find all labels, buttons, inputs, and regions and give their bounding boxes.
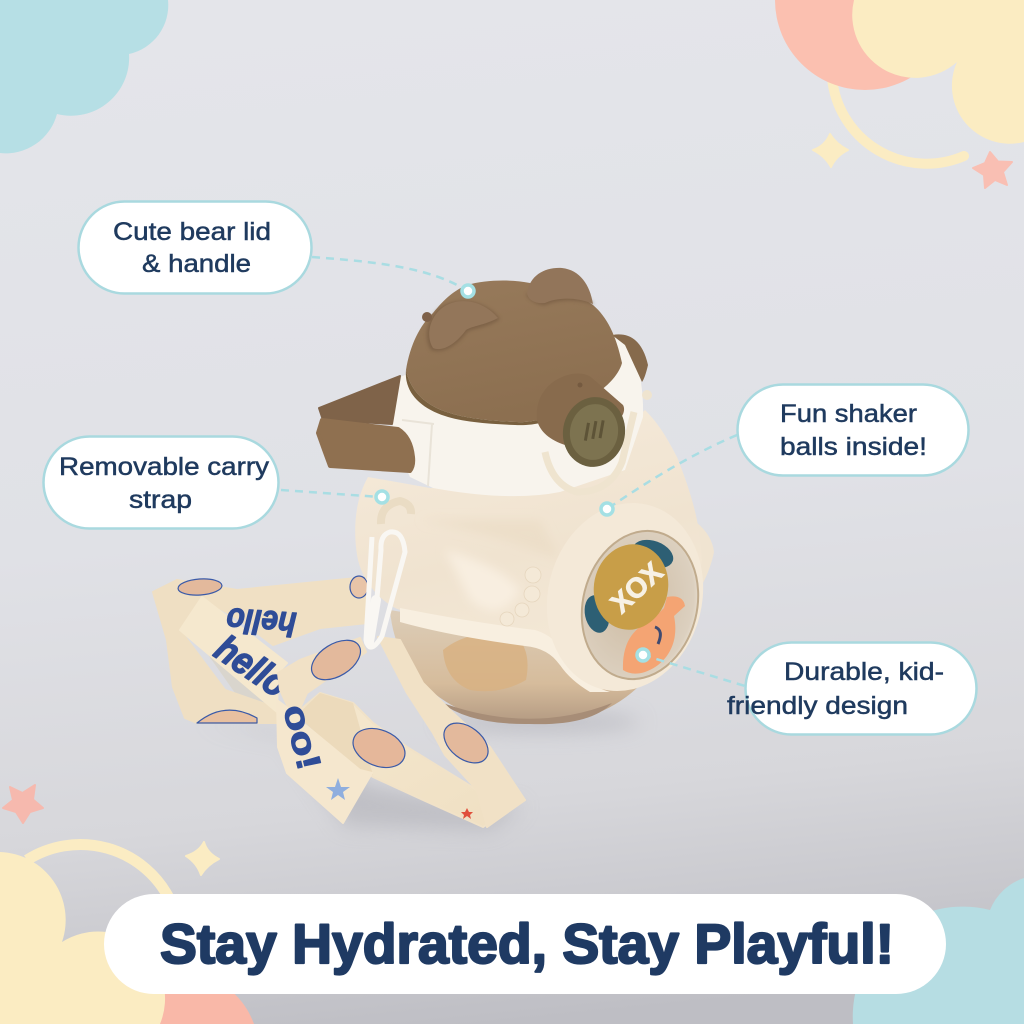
callout: fun shaker balls	[738, 384, 968, 476]
connector: carry strap	[281, 490, 380, 497]
icon: sparkle bottom left	[186, 842, 219, 875]
bottle: left ear	[429, 301, 498, 349]
product shadow	[200, 711, 640, 830]
decoration: top-right cloud and moon	[775, 0, 1024, 164]
product: strap front bands	[275, 632, 525, 827]
callout: cute bear lid: Cute bear lid	[113, 218, 271, 246]
bottle: orange shaker figure	[623, 596, 685, 674]
decoration: top-left cloud	[0, 0, 168, 153]
bottle: right ear	[527, 268, 593, 304]
bottle: blue shaker ball	[581, 535, 677, 635]
decoration: bottom-left cloud and moon	[0, 845, 254, 1024]
bottle: round button	[557, 392, 631, 472]
strap: hanging band	[378, 637, 525, 827]
strap: back lettering: hello	[225, 600, 298, 643]
bottle: XOX lettering: XOX	[604, 556, 669, 619]
bottle: porthole glass	[567, 518, 713, 692]
bottle: handle back	[319, 376, 400, 424]
bottle: dome lid	[406, 281, 622, 422]
bottle: white collar	[392, 330, 643, 496]
title banner: Stay Hydrated, Stay Playful!	[160, 912, 894, 975]
callout: durable design: Durable, kid-	[784, 658, 944, 686]
callout: removable carry strap: strap	[129, 486, 192, 514]
strap: folded band	[278, 638, 366, 715]
product: bottle	[318, 268, 723, 724]
callout: removable carry strap	[44, 436, 278, 528]
strap: oo lettering: oo!	[275, 701, 328, 774]
bottle: back knob	[612, 334, 648, 382]
bottle: bead dots	[500, 567, 541, 626]
strap: hello band	[180, 597, 287, 712]
callout: cute bear lid	[78, 202, 312, 294]
callout: durable design: friendly design	[727, 692, 908, 720]
bottle: yellow shaker disc	[586, 537, 676, 637]
strap: bear faces	[305, 632, 496, 775]
callout: cute bear lid: & handle	[142, 250, 251, 278]
product: strap rear bands	[153, 576, 368, 723]
bottle: porthole ring	[527, 486, 723, 708]
callout: fun shaker balls: balls inside!	[780, 433, 927, 461]
callout: fun shaker balls: Fun shaker	[780, 400, 917, 428]
icon: pink star top right	[973, 152, 1012, 188]
connector: shaker balls	[607, 435, 737, 509]
decoration: bottom-right cloud	[853, 878, 1024, 1024]
bottle: cream body	[355, 410, 702, 690]
strap: rear bear faces	[177, 576, 368, 723]
bottle: nozzle	[537, 374, 624, 445]
strap: back band	[177, 577, 367, 645]
bottle: strap loop and clip	[366, 501, 411, 647]
title banner	[104, 894, 946, 994]
icon: pink star bottom left	[3, 785, 43, 823]
strap: lower band	[277, 700, 372, 823]
bottle: handle front	[318, 420, 413, 471]
connector: bear lid	[312, 257, 466, 290]
bottle: body highlights	[420, 520, 560, 610]
bottle: face mark	[655, 627, 660, 644]
callout: durable design	[727, 642, 976, 734]
strap: long right band	[300, 693, 525, 827]
bottle: back bump	[696, 522, 714, 592]
icon: sparkle top right	[813, 134, 848, 167]
callout: removable carry strap: Removable carry	[59, 453, 270, 481]
strap: hollow of left loop	[178, 597, 277, 720]
strap: inner fold	[297, 693, 373, 775]
strap: front lettering: hello	[207, 628, 295, 706]
marker dots	[376, 285, 649, 661]
bottle: clear base	[390, 610, 640, 723]
strap: small stars	[326, 778, 350, 800]
bottle: hinge bracket	[545, 412, 634, 492]
bottle: ear shadows	[427, 289, 594, 351]
connector: durable design	[643, 655, 745, 686]
strap: left band	[153, 580, 277, 723]
